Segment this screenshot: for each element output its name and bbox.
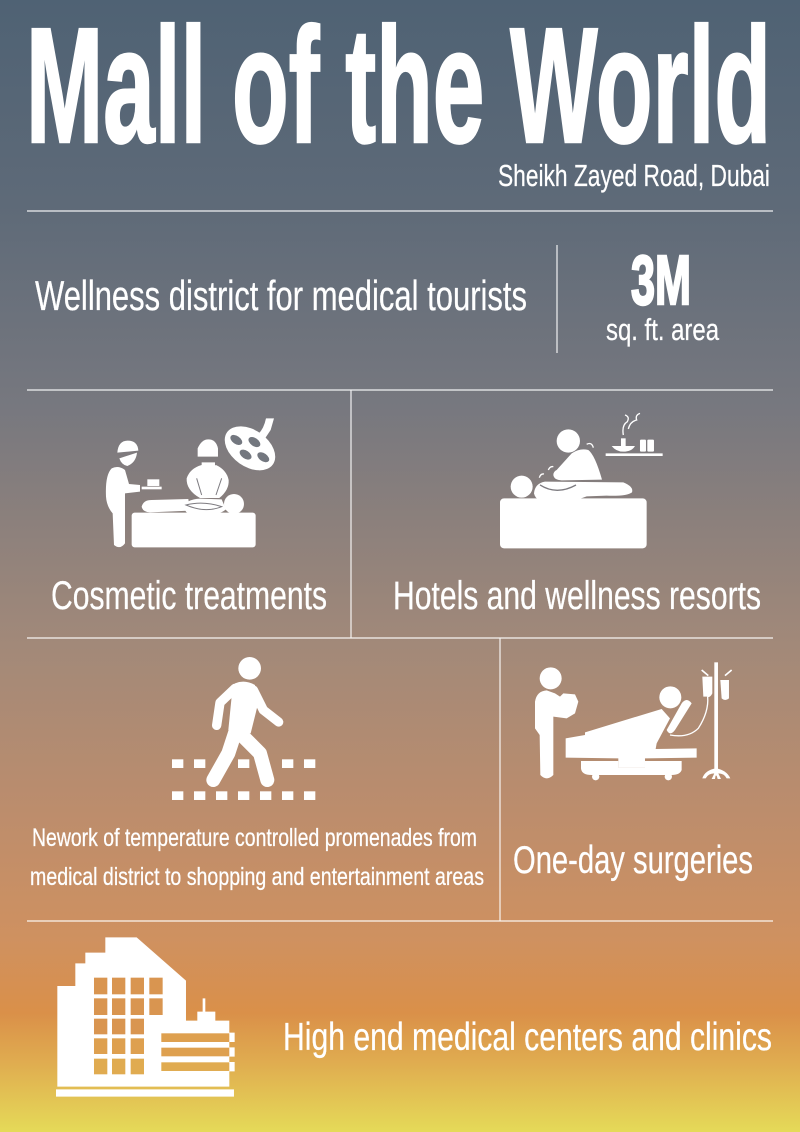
stat: 3M sq. ft. area: sq. ft. area xyxy=(606,312,720,347)
icon: massage xyxy=(500,413,663,548)
icon: cosmetic surgery xyxy=(106,417,283,547)
stat: 3M sq. ft. area: 3M xyxy=(631,241,691,319)
text: promenades: Nework of temperature controlled promenades from xyxy=(32,824,477,852)
icon: medical building xyxy=(56,937,235,1097)
text: promenades: medical district to shopping and entertainment areas xyxy=(30,863,484,891)
icon: patient on stretcher with IV xyxy=(535,662,732,780)
label: cosmetic treatments: Cosmetic treatments xyxy=(51,574,327,618)
text: promenades xyxy=(30,824,484,891)
text: wellness district: Wellness district for medical tourists xyxy=(35,272,527,319)
icon: walking figure on promenade xyxy=(172,657,315,800)
stat: 3M sq. ft. area xyxy=(606,241,720,347)
